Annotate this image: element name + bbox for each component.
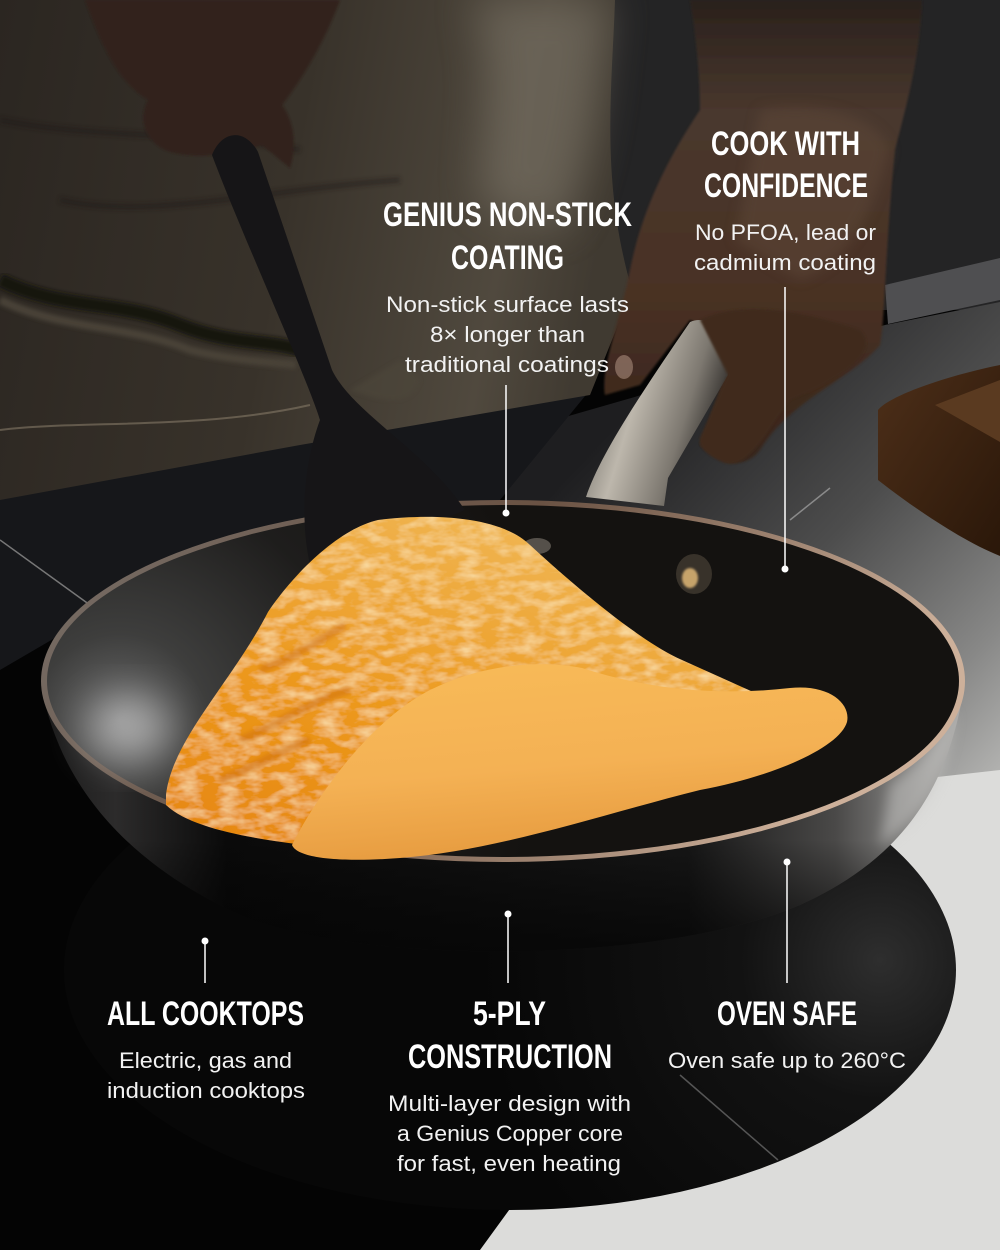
hand fingers over handle (700, 309, 866, 464)
frying pan (41, 500, 965, 951)
rivets (676, 554, 712, 594)
hand holding spatula (85, 0, 340, 168)
callout: genius non-stick coating (383, 196, 632, 516)
heading: 5-PLY (473, 995, 546, 1033)
heading: COATING (451, 239, 564, 277)
heading: CONSTRUCTION (408, 1038, 612, 1076)
heading: ALL COOKTOPS (107, 995, 304, 1033)
pan handle (586, 320, 728, 506)
heading (383, 196, 632, 277)
text block: traditional coatings (405, 352, 609, 377)
text block: 8× longer than (430, 322, 585, 347)
pan reflection (64, 730, 956, 1210)
arm and hand (604, 0, 922, 463)
pan rim (41, 500, 965, 862)
callout: 5-ply construction (388, 910, 631, 1176)
callout: oven safe (668, 858, 906, 1073)
text block (386, 292, 629, 377)
text block (107, 1048, 305, 1103)
text block: a Genius Copper core (397, 1121, 623, 1146)
callout: cook with confidence (694, 125, 876, 572)
marble surface (480, 770, 1000, 1250)
heading: OVEN SAFE (717, 995, 857, 1033)
text block: for fast, even heating (397, 1151, 621, 1176)
heading (408, 995, 612, 1076)
text block (388, 1091, 631, 1176)
omelette (166, 517, 847, 860)
cutting board (878, 365, 1000, 556)
text block: Oven safe up to 260°C (668, 1048, 906, 1073)
pointer (502, 385, 510, 516)
scrambled egg (166, 517, 762, 844)
heading: CONFIDENCE (704, 167, 868, 205)
text block: cadmium coating (694, 250, 876, 275)
text block: Multi-layer design with (388, 1091, 631, 1116)
text block: Non-stick surface lasts (386, 292, 629, 317)
heading: GENIUS NON-STICK (383, 196, 632, 234)
pointer (782, 287, 788, 572)
heading (704, 125, 868, 205)
text block (694, 220, 876, 275)
apron (0, 0, 632, 500)
callout: all cooktops (107, 938, 305, 1103)
heading: COOK WITH (711, 125, 860, 163)
text block: No PFOA, lead or (695, 220, 876, 245)
text block: induction cooktops (107, 1078, 305, 1103)
spatula (212, 135, 465, 573)
pan interior (47, 505, 959, 857)
pan body (42, 680, 965, 951)
pointer (504, 910, 512, 983)
text block: Electric, gas and (119, 1048, 292, 1073)
pointer (202, 938, 208, 983)
pointer (784, 858, 790, 983)
folded egg (292, 664, 847, 860)
